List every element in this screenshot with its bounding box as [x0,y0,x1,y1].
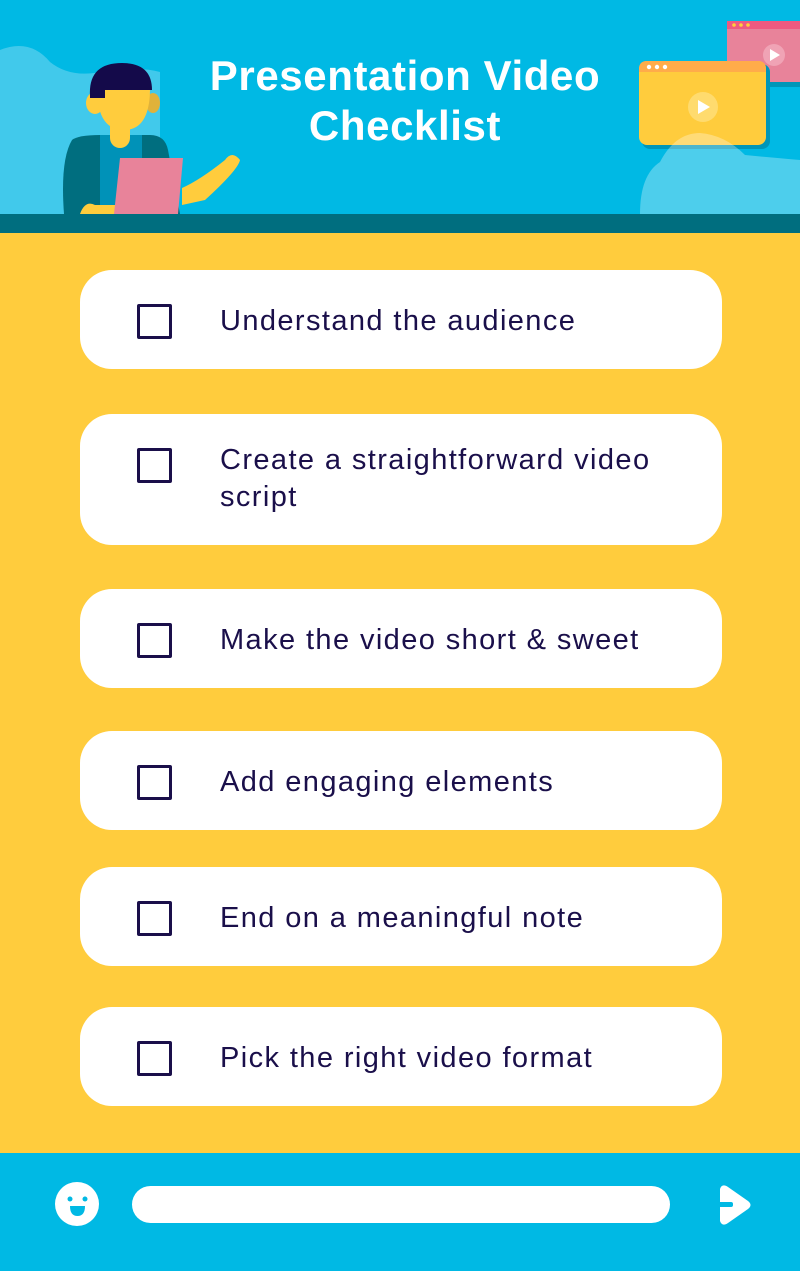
icon: pink video window [727,21,800,87]
card 6 [80,1007,722,1106]
header [0,0,800,214]
card 4: Add engaging elements [220,766,554,798]
person [63,63,240,214]
card 5: End on a meaningful note [220,902,584,934]
icon: send arrow [718,1185,750,1225]
header illustration [0,21,800,214]
icon: smiley [55,1182,99,1226]
card 5 [80,867,722,966]
card 4 [80,731,722,830]
teal band [0,214,800,233]
icon: yellow video window [639,61,770,149]
card 1 [80,270,722,369]
title [210,52,600,149]
input pill [132,1186,670,1223]
title: Presentation Video [210,52,600,99]
title: Checklist [309,102,501,149]
card 2: Create a straightforward video script [220,444,650,513]
card 2 [80,414,722,545]
footer icons [55,1182,750,1226]
footer [0,1153,800,1271]
card 3: Make the video short & sweet [220,624,640,656]
card 6: Pick the right video format [220,1042,593,1074]
card 1: Understand the audience [220,305,576,337]
card 3 [80,589,722,688]
